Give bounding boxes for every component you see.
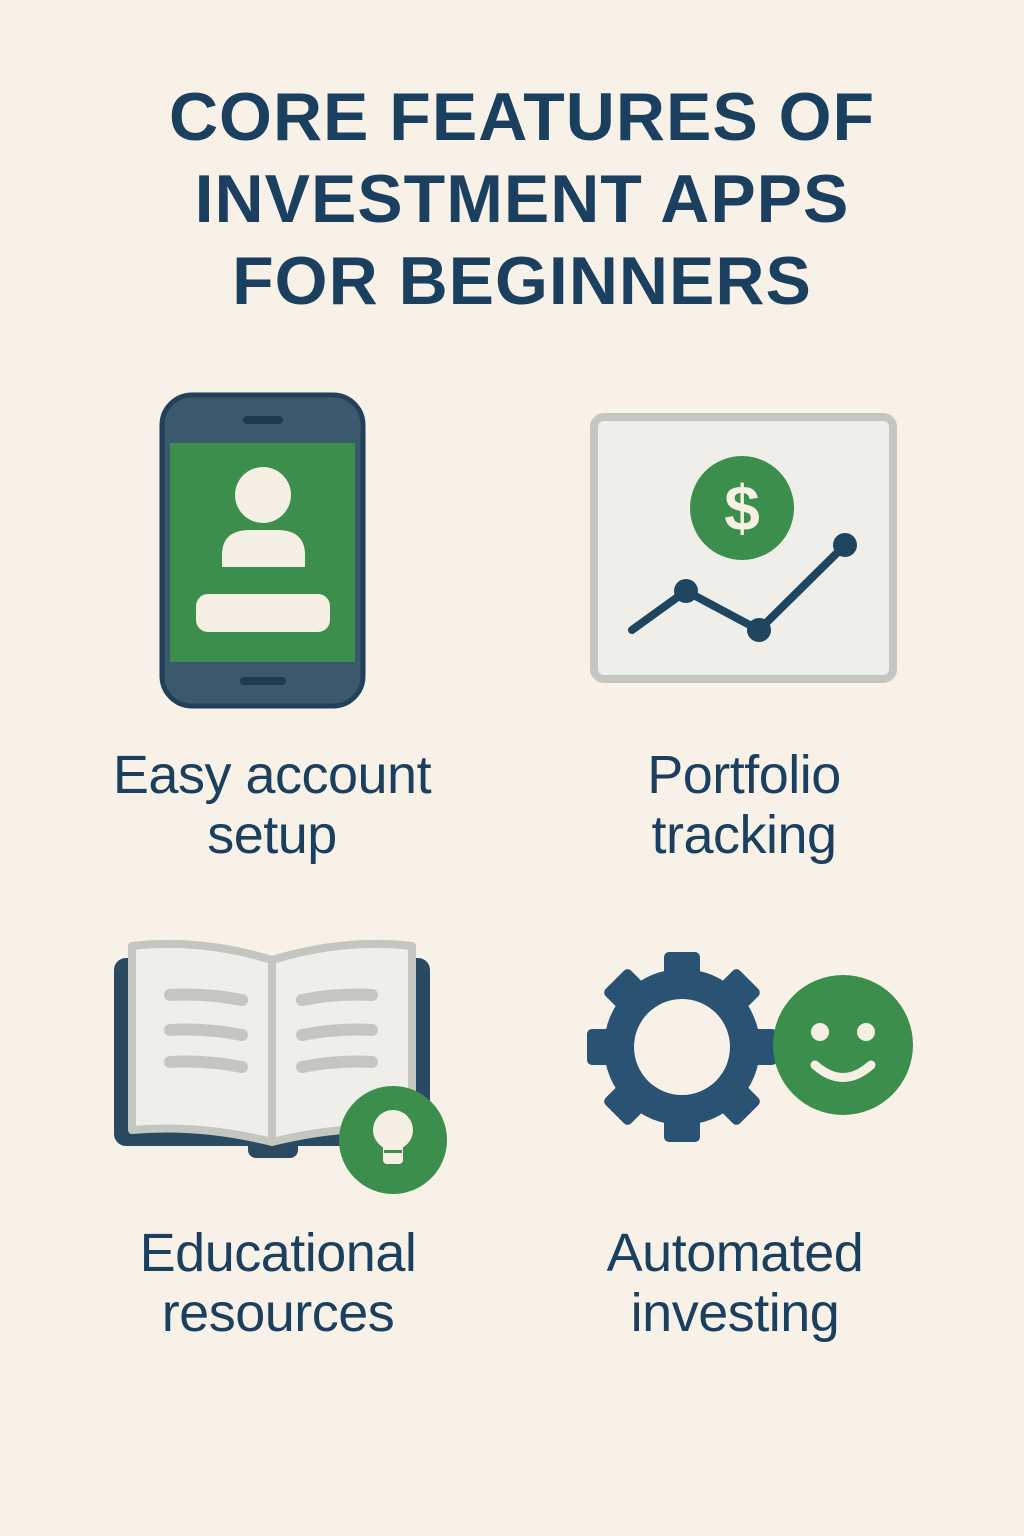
label: easy account setup: Easy account — [113, 745, 431, 805]
label: easy account setup: setup — [207, 805, 337, 865]
label: educational resources: resources — [162, 1283, 394, 1343]
label: portfolio tracking: Portfolio — [647, 745, 841, 805]
label: educational resources: Educational — [140, 1223, 416, 1283]
title — [169, 79, 875, 319]
label: portfolio tracking: tracking — [651, 805, 837, 865]
label: automated investing — [606, 1223, 863, 1343]
label: automated investing: investing — [631, 1283, 839, 1343]
title: CORE FEATURES OF — [169, 79, 875, 155]
title: INVESTMENT APPS — [195, 161, 849, 237]
label: automated investing: Automated — [607, 1223, 863, 1283]
title: FOR BEGINNERS — [232, 243, 812, 319]
label: educational resources — [140, 1223, 416, 1343]
icon: portfolio chart: $ — [724, 472, 760, 544]
label: portfolio tracking — [647, 745, 841, 865]
label: easy account setup — [113, 745, 432, 865]
